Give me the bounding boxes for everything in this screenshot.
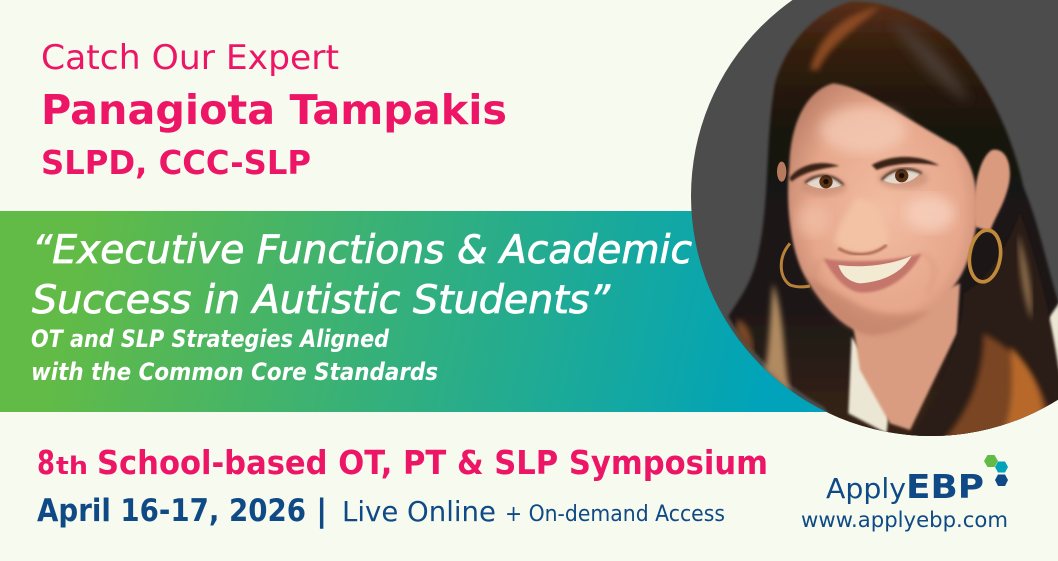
title: session line 1: “Executive Functions & Academic bbox=[32, 228, 692, 273]
event format: Live Online bbox=[342, 495, 496, 528]
smile lines bbox=[814, 253, 934, 293]
icon: teal hexagon bbox=[995, 462, 1008, 472]
hair part highlight bbox=[810, 7, 880, 70]
divider bar: | bbox=[316, 493, 327, 529]
banner: gradient band bbox=[0, 211, 840, 412]
face shading lower bbox=[805, 277, 930, 335]
heading: catch our expert: Catch Our Expert bbox=[41, 38, 339, 78]
face bbox=[788, 83, 977, 335]
teeth bbox=[838, 256, 912, 283]
face highlights bbox=[820, 107, 907, 153]
subtitle: line 1: OT and SLP Strategies Aligned bbox=[31, 325, 390, 353]
icon: navy hexagon bbox=[995, 474, 1008, 486]
text: credentials: SLPD, CCC-SLP bbox=[41, 143, 311, 182]
ear right bbox=[974, 150, 1010, 232]
icon: green hexagon bbox=[984, 455, 998, 467]
website url: www.applyebp.com bbox=[801, 508, 1008, 532]
logo: ApplyEBP: EBP bbox=[906, 467, 984, 506]
ear left bbox=[777, 162, 786, 182]
neck bbox=[853, 283, 960, 430]
eye sockets bbox=[802, 180, 847, 197]
logo: ApplyEBP: Apply bbox=[826, 472, 906, 505]
nose bbox=[835, 197, 888, 253]
event name: 8 bbox=[37, 443, 55, 482]
event name: th bbox=[56, 452, 88, 480]
on-demand access: + On-demand Access bbox=[505, 502, 725, 527]
logo: ApplyEBP bbox=[826, 455, 1008, 506]
event name: School-based OT, PT & SLP Symposium bbox=[97, 443, 768, 482]
shirt bbox=[848, 302, 1058, 433]
mouth bbox=[823, 253, 922, 293]
eyes bbox=[807, 170, 920, 189]
earring right bbox=[966, 228, 1004, 284]
photo: expert portrait bbox=[690, 0, 1058, 440]
event dates: April 16-17, 2026 bbox=[37, 493, 306, 529]
title: session line 2: Success in Autistic Students” bbox=[32, 278, 611, 323]
heading: expert name: Panagiota Tampakis bbox=[41, 86, 507, 134]
subtitle: line 2: with the Common Core Standards bbox=[31, 358, 438, 386]
earring left bbox=[781, 243, 810, 287]
left blond lock bbox=[765, 283, 790, 393]
right hair lock bbox=[907, 213, 1058, 440]
eyebrows bbox=[789, 157, 939, 182]
